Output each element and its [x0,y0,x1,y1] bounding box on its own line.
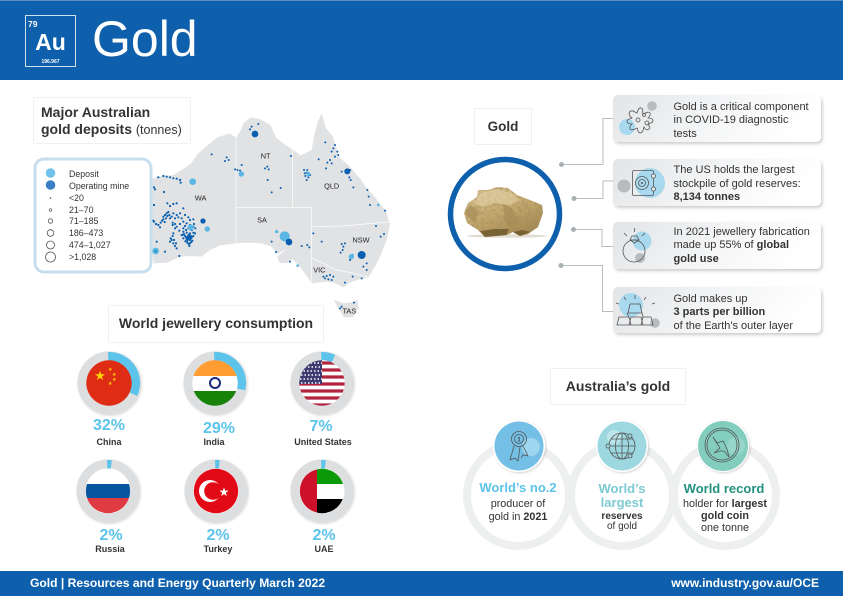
legend: 474–1,027 [69,240,111,250]
donut: Turkey: ★ [219,485,229,499]
footer band [0,571,843,596]
card: COVID: in COVID-19 diagnostic [674,114,789,126]
card: COVID: tests [674,128,697,140]
legend: Deposit [69,169,99,179]
state labels: NSW [352,236,370,245]
icon: ring [623,228,652,263]
heading: world jewellery: World jewellery consumption [119,315,313,331]
donut: India: India [203,437,225,447]
card: US stockpile: The US holds the largest [674,164,795,176]
card: parts per billion: 3 parts per billion [674,306,765,318]
donut: United States: United States [294,437,352,447]
icon: kangaroo coin [697,420,749,472]
legend: 21–70 [69,205,94,215]
heading: gold [474,108,532,144]
donut: Turkey: 2% [206,527,230,544]
state labels: TAS [342,306,356,315]
donut: UAE [295,464,349,554]
stat ring: world's largest reserves [571,420,673,546]
icon: periodic table tile Au: 196.967 [41,59,60,65]
donut: Russia [81,464,135,554]
donut: China [82,356,136,447]
donut: Turkey [189,464,243,554]
gold nugget photo in ring [450,160,560,268]
card: parts per billion: of the Earth's outer layer [674,320,793,332]
heading: gold: Gold [488,119,518,134]
connector lines [558,118,613,312]
legend: 71–185 [69,216,98,226]
stat ring: world no.2 producer: World’s no.2 [479,480,557,495]
state labels: QLD [324,182,339,191]
stat ring: world record coin: one tonne [701,522,749,534]
state labels: SA [257,216,267,225]
icon: gold bars [616,293,660,328]
donut: China: 32% [93,417,125,434]
footer band: Gold | Resources and Energy Quarterly March 2022 [30,576,325,590]
map: Australia deposits [138,113,390,317]
icon: globe [596,420,648,472]
stat ring: world's largest reserves: largest [601,495,644,510]
legend: 186–473 [69,228,103,238]
stat ring: world no.2 producer: producer of [491,498,546,510]
donut: Russia: Russia [95,544,126,554]
icon: safe [618,168,665,198]
card: US stockpile [613,159,821,206]
heading: major deposits: gold deposits (tonnes) [41,121,182,137]
legend: >1,028 [69,252,96,262]
donut: United States [294,356,352,447]
state labels: WA [195,193,207,202]
icon: periodic table tile Au: 79 [28,19,38,29]
icon: periodic table tile Au [26,16,76,66]
donut: China: ★ [112,377,117,383]
card: US stockpile: 8,134 tonnes [674,191,740,203]
heading: major deposits [34,98,190,144]
footer band: www.industry.gov.au/OCE [670,576,819,590]
icon: virus [619,101,657,135]
donut: China: China [96,437,122,447]
legend: Operating mine [69,181,129,191]
title: Gold [92,11,198,67]
donut: China: ★ [108,367,113,373]
card: COVID [613,95,821,142]
legend [35,159,151,272]
donut: United States: 7% [309,418,333,435]
heading: Australia's gold: Australia’s gold [566,378,670,394]
legend: <20 [69,193,84,203]
donut: UAE: UAE [314,544,334,554]
heading: major deposits: Major Australian [41,104,150,120]
state labels [195,152,370,315]
icon: periodic table tile Au: Au [35,29,66,55]
card: parts per billion [613,287,821,333]
donut: UAE: 2% [312,527,336,544]
stat ring: world record coin: gold coin [701,510,749,522]
donut: Turkey: Turkey [204,544,232,554]
card: jewellery: made up 55% of global [674,239,789,251]
card: jewellery: In 2021 jewellery fabrication [674,226,810,238]
stat ring: world's largest reserves: of gold [607,521,637,532]
stat ring: world's largest reserves: reserves [601,511,643,522]
state labels: VIC [313,266,326,275]
stat ring: world no.2 producer [467,420,569,546]
donut: India [188,356,242,447]
stat ring: world record coin: World record [684,481,764,496]
stat ring: world no.2 producer: gold in 2021 [489,511,547,523]
stat ring: world record coin: holder for largest [683,498,767,510]
donut: China: ★ [94,368,106,383]
icon: ribbon badge: 1 [517,438,521,444]
heading: Australia's gold [550,368,686,404]
stat ring: world's largest reserves: World’s [599,481,645,496]
donut: India: 29% [203,420,235,437]
card: jewellery: gold use [674,253,719,265]
card: US stockpile: stockpile of gold reserves: [674,178,801,190]
card: COVID: Gold is a critical component [674,101,809,113]
donut: China: ★ [112,372,117,378]
state labels: NT [261,152,271,161]
stat ring: world record coin [674,420,776,546]
card: jewellery [613,222,821,269]
donut: China: ★ [108,381,113,387]
heading: world jewellery [108,306,324,342]
donut: Russia: 2% [99,527,123,544]
card: parts per billion: Gold makes up [674,293,747,305]
header band [0,0,843,80]
